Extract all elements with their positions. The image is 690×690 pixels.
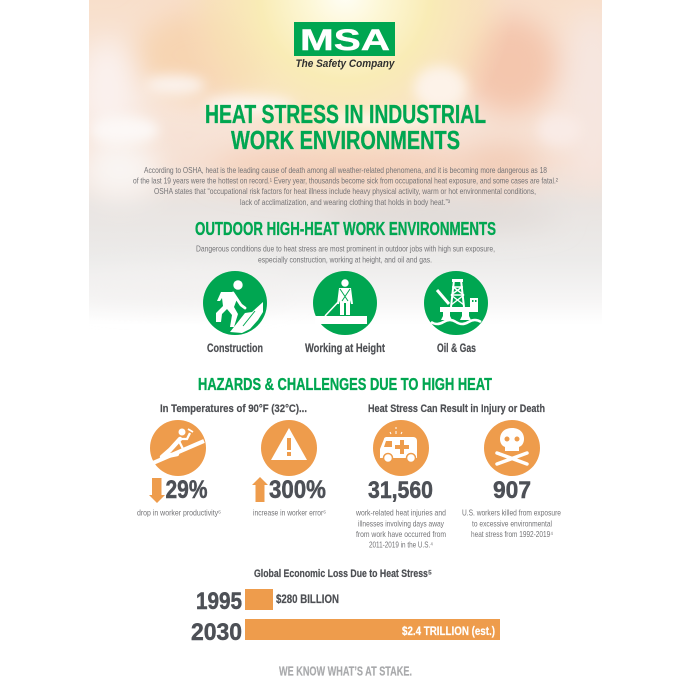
bar: 1995: 1995 — [196, 588, 242, 615]
caption: deaths — [462, 508, 561, 539]
label: oil and gas: Oil & Gas — [437, 343, 476, 355]
intro paragraph: of the last 19 years were the hottest on record.¹ Every year, thousands become sick from occupational heat exposure, and some cases are fatal.² — [133, 176, 558, 186]
caption: productivity: drop in worker productivity⁶ — [137, 508, 221, 518]
outdoor description — [196, 244, 495, 264]
intro paragraph: OSHA states that “occupational risk factors for heat illness include heavy physical activity, warm or hot environmental conditions, — [154, 186, 536, 196]
caption: injuries: work-related heat injuries and — [355, 508, 446, 518]
outdoor description: Dangerous conditions due to heat stress are most prominent in outdoor jobs with high sun exposure, — [196, 244, 495, 254]
caption: injuries — [355, 508, 446, 550]
intro paragraph: According to OSHA, heat is the leading cause of death among all weather-related phenomena, and it is becoming more dangerous as 18 — [144, 165, 547, 175]
logo: MSA The Safety Company — [294, 22, 395, 70]
title: WORK ENVIRONMENTS — [231, 125, 460, 155]
bar: 2030: $2.4 TRILLION (est.) — [402, 626, 495, 638]
bar: 1995 — [196, 588, 339, 615]
icon: warning triangle — [261, 420, 317, 476]
title — [205, 99, 486, 155]
caption: worker error: increase in worker error⁶ — [253, 508, 326, 518]
caption: injuries: illnesses involving days away — [358, 518, 445, 528]
caption: injuries: from work have occurred from — [356, 529, 446, 539]
bar: 1995: $280 BILLION — [276, 594, 339, 606]
label: working at height: Working at Height — [305, 343, 385, 355]
bar: 2030 — [191, 619, 500, 646]
intro paragraph: lack of acclimatization, and wearing clothing that holds in body heat.”³ — [240, 197, 450, 207]
title: HEAT STRESS IN INDUSTRIAL — [205, 99, 486, 129]
tagline: WE KNOW WHAT’S AT STAKE. — [279, 664, 412, 678]
heading: outdoor environments: OUTDOOR HIGH-HEAT WORK ENVIRONMENTS — [195, 219, 496, 239]
arrow: down — [149, 478, 165, 503]
icon: roofer on slope — [150, 420, 206, 476]
logo: MSA The Safety Company: The Safety Company — [296, 58, 395, 70]
bar chart: global economic loss — [191, 568, 500, 646]
intro paragraph — [133, 165, 558, 207]
value: 300 percent: 300% — [269, 476, 326, 504]
icon: skull and crossbones — [484, 420, 540, 476]
caption: deaths: heat stress from 1992-2019⁴ — [471, 529, 553, 539]
chart title: Global Economic Loss Due to Heat Stress⁵ — [254, 568, 432, 580]
logo: MSA The Safety Company: MSA — [300, 24, 390, 57]
stat: deaths — [462, 420, 561, 539]
outdoor description: especially construction, working at height, and oil and gas. — [258, 254, 432, 264]
arrow: up — [252, 477, 268, 502]
caption: deaths: to excessive environmental — [472, 518, 552, 528]
icon: worker in harness — [313, 271, 377, 335]
icon: ambulance — [373, 420, 429, 476]
icon: worker shoveling — [203, 271, 267, 335]
subheading: temperatures: In Temperatures of 90°F (32°C)... — [160, 403, 307, 415]
label: construction: Construction — [207, 343, 263, 355]
value: 31,560: 31,560 — [368, 477, 433, 504]
stat: injuries — [355, 420, 446, 550]
bar: 2030: 2030 — [191, 619, 242, 646]
panel: construction — [203, 271, 267, 355]
heading: hazards and challenges: HAZARDS & CHALLENGES DUE TO HIGH HEAT — [198, 374, 492, 394]
stat: worker error — [252, 420, 326, 518]
stat: productivity — [137, 420, 221, 518]
value: 29 percent: 29% — [166, 476, 208, 504]
background: sky and clouds — [89, 0, 602, 310]
value: 907: 907 — [493, 477, 531, 504]
subheading: injury or death: Heat Stress Can Result in Injury or Death — [368, 403, 545, 415]
caption: injuries: 2011-2019 in the U.S.⁴ — [369, 540, 433, 550]
panel: oil and gas — [424, 271, 488, 355]
panel: working at height — [305, 271, 385, 355]
icon: offshore oil rig — [424, 271, 488, 335]
caption: deaths: U.S. workers killed from exposure — [462, 508, 561, 518]
